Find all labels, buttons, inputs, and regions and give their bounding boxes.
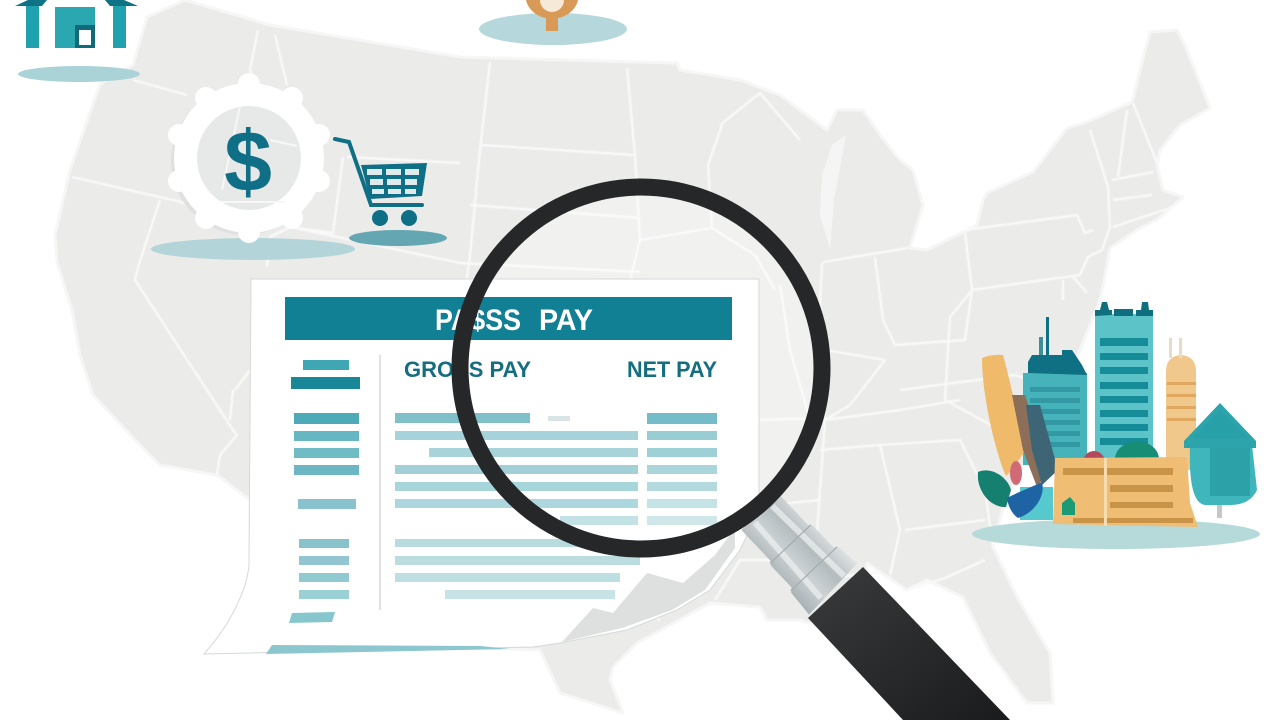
- icon: location pin with ground shadow: [479, 0, 627, 45]
- paper: [204, 279, 759, 654]
- page curl: [562, 528, 735, 642]
- map: state borders: [72, 30, 1173, 620]
- lens glow over map: [469, 196, 813, 540]
- produce: [978, 442, 1159, 520]
- middle column lines: [395, 413, 640, 599]
- icon: shopping cart: [335, 139, 447, 246]
- icon: city and market goods cluster: [972, 302, 1260, 549]
- baguette: [982, 355, 1024, 476]
- header band: PA$SS: [435, 304, 521, 337]
- tan tower: [1166, 338, 1196, 470]
- bottom accent line: [266, 645, 510, 654]
- wooden crate: [1053, 457, 1198, 527]
- map: Lake Michigan: [820, 135, 846, 250]
- icon: house with ground shadow: [15, 0, 140, 82]
- header band: PAY: [539, 304, 593, 337]
- header band: [285, 297, 732, 340]
- bottle: [1012, 395, 1058, 487]
- payslip document: [204, 279, 759, 654]
- handle: [808, 567, 1010, 720]
- house: [1184, 403, 1257, 518]
- magnifying glass: [460, 187, 1010, 720]
- lens ring: [460, 187, 822, 549]
- teal building: [1023, 317, 1087, 465]
- right column lines: [647, 413, 717, 525]
- tall tower: [1095, 302, 1153, 464]
- gross pay heading: GROSS PAY: [404, 357, 531, 382]
- column divider: [379, 355, 381, 610]
- metal collar: [735, 488, 860, 615]
- dollar sign: $: [224, 114, 272, 210]
- icon: gear with dollar sign: [151, 73, 355, 260]
- left column lines: [289, 360, 360, 623]
- net pay heading: NET PAY: [627, 357, 717, 382]
